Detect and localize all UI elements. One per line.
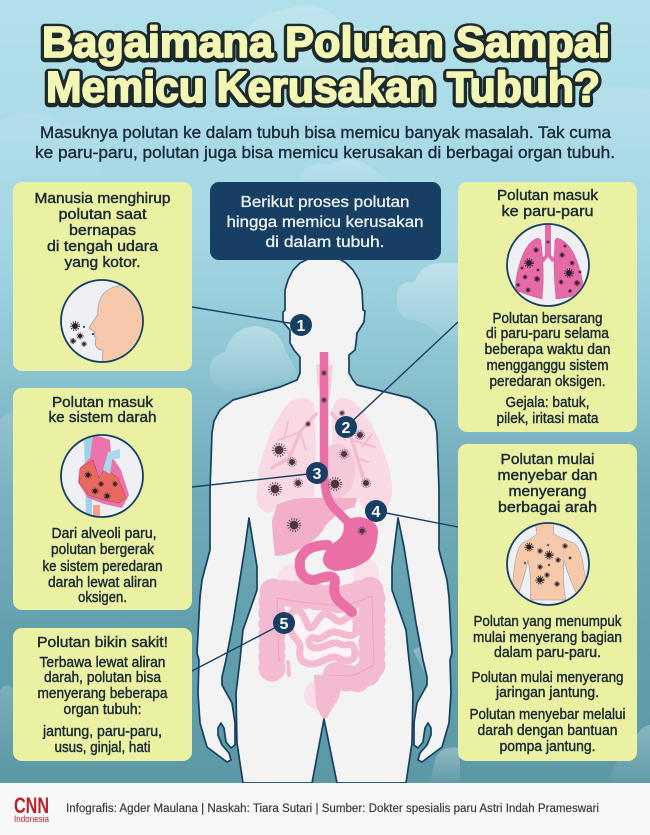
panel text: darah, polutan bisa [44,670,162,686]
panel heading: menyebar dan [498,468,598,484]
icon: heart [61,434,143,517]
panel text: darah dengan bantuan [478,723,618,739]
panel text: mulai menyerang bagian [473,630,622,646]
lungs [256,398,392,513]
panel heading: ke paru-paru [502,204,594,220]
panel text: oksigen. [78,590,127,606]
panel text [38,655,168,756]
title: Memicu Kerusakan Tubuh? [46,63,600,112]
small intestine [290,610,356,664]
panel: polutan bikin sakit [13,628,192,761]
stomach [323,517,378,571]
panel heading: Polutan mulai [500,452,594,468]
panel heading: menyerang [508,484,586,500]
number badge 5 [273,612,295,634]
icon: face breathing pollutants [61,280,150,365]
esophagus and stomach tube [324,352,350,524]
panel text: Polutan bersarang [492,311,602,327]
number badge 5: 5 [280,616,289,633]
trachea shell [316,364,333,440]
panel text: Polutan mulai menyerang [472,670,624,686]
intro text [35,123,615,162]
credits: Infografis: Agder Maulana | Naskah: Tiara Sutari | Sumber: Dokter spesialis paru Astri Indah Prameswari [66,803,599,815]
callout: intro box: di dalam tubuh. [266,234,384,251]
panel text: darah lewat aliran [48,575,157,591]
panel text: peredaran oksigen. [490,374,606,390]
pollutant particles [269,370,370,535]
panel heading: polutan saat [58,207,146,223]
number badge 2 [335,416,357,438]
panel heading [34,191,170,271]
intro text: Masuknya polutan ke dalam tubuh bisa memicu banyak masalah. Tak cuma [40,123,612,142]
intro text: ke paru-paru, polutan juga bisa memicu kerusakan di berbagai organ tubuh. [35,143,615,162]
panel: masuk paru-paru [458,182,637,432]
logo: CNN Indonesia: Indonesia [14,814,49,824]
title [42,18,610,113]
panel text: beberapa waktu dan [484,342,610,358]
panel text: jaringan jantung. [495,685,599,701]
number badge 2: 2 [342,420,351,437]
panel heading: Polutan masuk [52,395,154,411]
large intestine [272,590,372,695]
number badge 4: 4 [372,504,381,521]
panel text [484,311,610,427]
panel text: polutan bergerak [51,542,155,558]
bladder [304,679,340,711]
title: Memicu Kerusakan Tubuh? [46,64,600,113]
title: Bagaimana Polutan Sampai [42,18,610,67]
liver [272,498,357,556]
icon: lungs [507,224,589,306]
panel heading: Polutan bikin sakit! [37,635,168,651]
logo: CNN Indonesia: CNN [14,793,49,818]
panel text: usus, ginjal, hati [54,740,150,756]
panel text: dalam paru-paru. [494,645,601,661]
panel text: pilek, iritasi mata [496,411,599,427]
number badge 3: 3 [313,466,322,483]
panel heading: Polutan masuk [497,188,599,204]
panel: menghirup polutan [13,182,192,371]
panel text [470,614,626,755]
panel text: jantung, paru-paru, [42,724,162,740]
internal organs [256,352,392,718]
colon inner line [277,596,374,676]
panel text: pompa jantung. [500,739,596,755]
heart shadow [322,444,356,500]
panel: sistem darah [13,388,192,610]
bronchi [272,413,375,477]
panel text: Polutan menyebar melalui [470,707,626,723]
duodenum [300,545,352,612]
panel heading: di tengah udara [47,239,159,255]
gallbladder [287,545,297,551]
footer [0,783,650,835]
callout: intro box [210,182,441,260]
kidneys [278,564,306,592]
callout: intro box: Berikut proses polutan [240,194,410,211]
panel text: Terbawa lewat aliran [40,655,166,671]
panel heading: yang kotor. [64,255,140,271]
panel heading: bernapas [69,223,136,239]
number badge 3 [306,462,328,484]
number badge 1: 1 [297,318,306,335]
panel heading [497,188,599,220]
panel text: ke sistem peredaran [42,559,162,575]
number badge 4 [365,500,387,522]
panel heading [48,395,156,426]
panel text: Polutan yang menumpuk [474,614,622,630]
rectum [314,675,340,718]
panel: menyebar [458,444,637,761]
connector lines [192,307,458,671]
panel text: organ tubuh: [64,702,142,718]
panel text: menyerang beberapa [38,686,168,702]
panel text: di paru-paru selama [486,326,610,342]
panel text [42,526,162,606]
panel heading: berbagai arah [498,500,597,516]
callout: intro box: hingga memicu kerusakan [226,214,424,231]
panel text: Gejala: batuk, [506,395,590,411]
panel heading [498,452,598,516]
panel text: Dari alveoli paru, [52,526,156,542]
body silhouette [197,256,452,783]
panel text: mengganggu sistem [486,358,608,374]
panel heading: Manusia menghirup [34,191,170,207]
icon: torso with pollutants [507,522,590,605]
title: Bagaimana Polutan Sampai [42,19,610,68]
number badge 1 [290,314,312,336]
panel heading: ke sistem darah [48,410,156,426]
logo: CNN Indonesia [14,793,49,824]
